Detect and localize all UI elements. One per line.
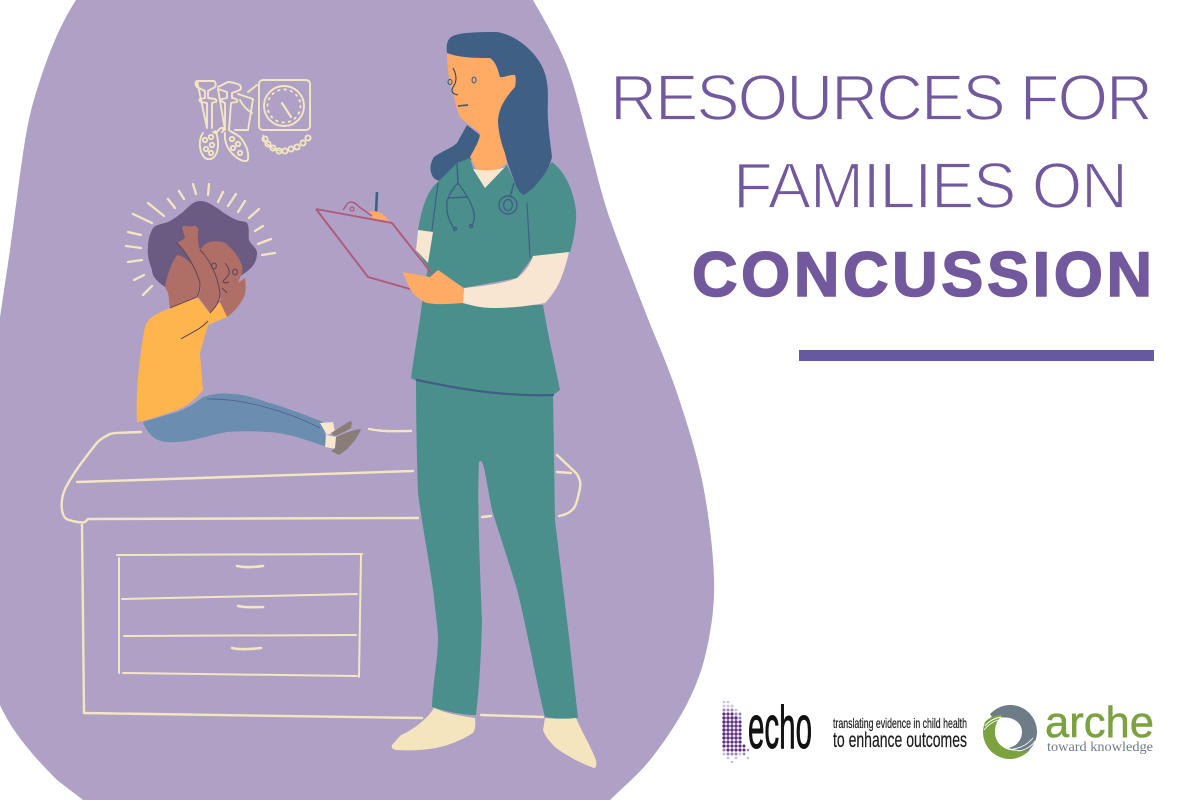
title line 2: FAMILIES ON: [733, 149, 1128, 222]
nurse shoes: [392, 708, 596, 768]
child sleeve: [208, 302, 227, 325]
undershirt: [473, 167, 505, 188]
wall medical equipment: [196, 80, 311, 161]
infographic canvas: echo: [748, 694, 812, 761]
child shoes: [331, 421, 361, 455]
logo: echo: [722, 694, 812, 763]
title line 1: RESOURCES FOR: [610, 61, 1153, 134]
trouser crease: [207, 399, 320, 428]
logo: arche: [983, 698, 1154, 759]
child socks: [320, 422, 337, 449]
drawers: [117, 554, 362, 677]
child neck and head: [165, 255, 200, 308]
arche swirl: [983, 705, 1037, 759]
exam table: [62, 429, 580, 718]
nurse neck and face: [447, 53, 516, 172]
title: [610, 61, 1153, 310]
left undersleeve: [416, 230, 433, 263]
child shirt crease: [181, 321, 208, 339]
scrub seams and hem: [417, 183, 553, 395]
title underline: [799, 350, 1154, 361]
pain rays: [126, 184, 275, 295]
child arm outlines: [170, 243, 220, 313]
nurse trousers: [416, 380, 578, 719]
chart card: [235, 85, 257, 130]
child far arm: [218, 278, 246, 317]
nurse face details: [448, 68, 476, 106]
logo: tagline: [833, 715, 967, 752]
table base: [82, 525, 543, 718]
right undersleeve: [463, 252, 569, 308]
nurse front hair: [447, 32, 552, 195]
child hair: [148, 201, 257, 290]
clipboard: [316, 202, 433, 289]
child face: [200, 241, 242, 300]
child shirt: [137, 297, 210, 422]
background blob: [0, 0, 714, 800]
child holding head: [126, 184, 361, 455]
stethoscope: [447, 163, 517, 231]
table cushion: [62, 429, 580, 522]
pen: [376, 192, 377, 213]
child raised arm: [177, 226, 220, 313]
child trousers: [143, 393, 327, 447]
nurse hand: [403, 270, 464, 304]
title line 3: CONCUSSION: [692, 240, 1152, 310]
arche wordmark: arche: [1045, 698, 1154, 747]
nurse back hair: [430, 125, 481, 181]
otoscope right: [218, 82, 248, 161]
echo dot grid: [722, 701, 749, 763]
nurse: [316, 32, 596, 768]
child facial features: [212, 263, 237, 293]
tagline line 2: to enhance outcomes: [833, 729, 967, 752]
blood pressure gauge: [259, 80, 311, 154]
otoscope left: [196, 81, 223, 159]
arche tagline: toward knowledge: [1047, 739, 1153, 754]
tagline line 1: translating evidence in child health: [833, 715, 967, 731]
fingers on pen: [369, 211, 389, 221]
nurse scrub top: [411, 158, 576, 396]
